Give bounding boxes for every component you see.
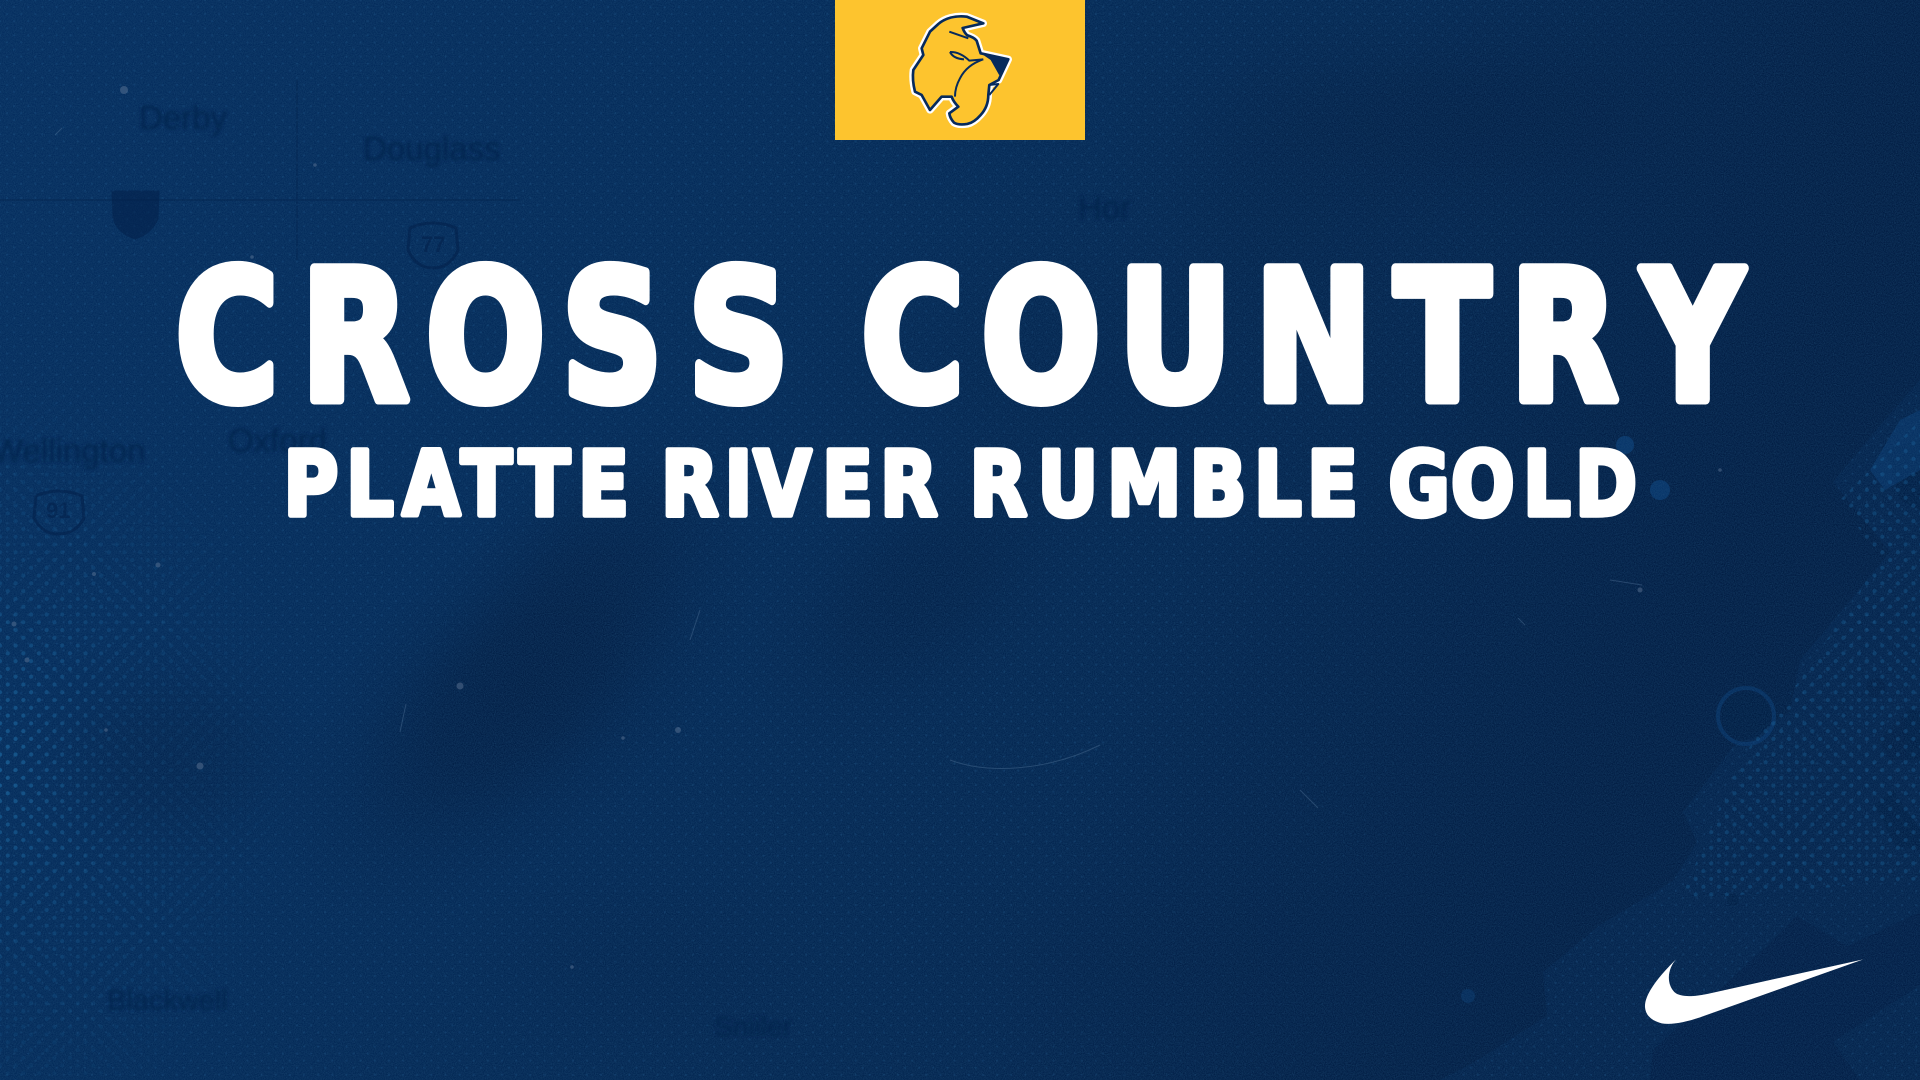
- ghost map labels: [0, 99, 1131, 1042]
- ghost map labels: Derby: [139, 99, 228, 136]
- ghost highway shields: 91: [46, 498, 70, 523]
- ink splatter, lower right: [1000, 0, 1920, 1080]
- subtitle: PLATTE RIVER RUMBLE GOLD: [284, 434, 1637, 537]
- title: CROSS COUNTRY: [175, 233, 1745, 443]
- ghost highway shields: 77: [421, 232, 445, 257]
- ghost map lines: [0, 80, 520, 260]
- logo tab: [835, 0, 1085, 140]
- ghost highway shields: [34, 192, 458, 534]
- dust specks: [12, 86, 1722, 969]
- icon: lion head: [913, 16, 1008, 124]
- ghost map labels: Oxford: [228, 422, 327, 459]
- icon: nike swoosh: [1645, 959, 1863, 1024]
- ghost map labels: Sniiler: [714, 1011, 792, 1042]
- ghost map labels: Douglass: [363, 130, 501, 167]
- ghost map labels: Blackwell: [107, 985, 228, 1017]
- ghost map labels: Hor: [1078, 189, 1131, 226]
